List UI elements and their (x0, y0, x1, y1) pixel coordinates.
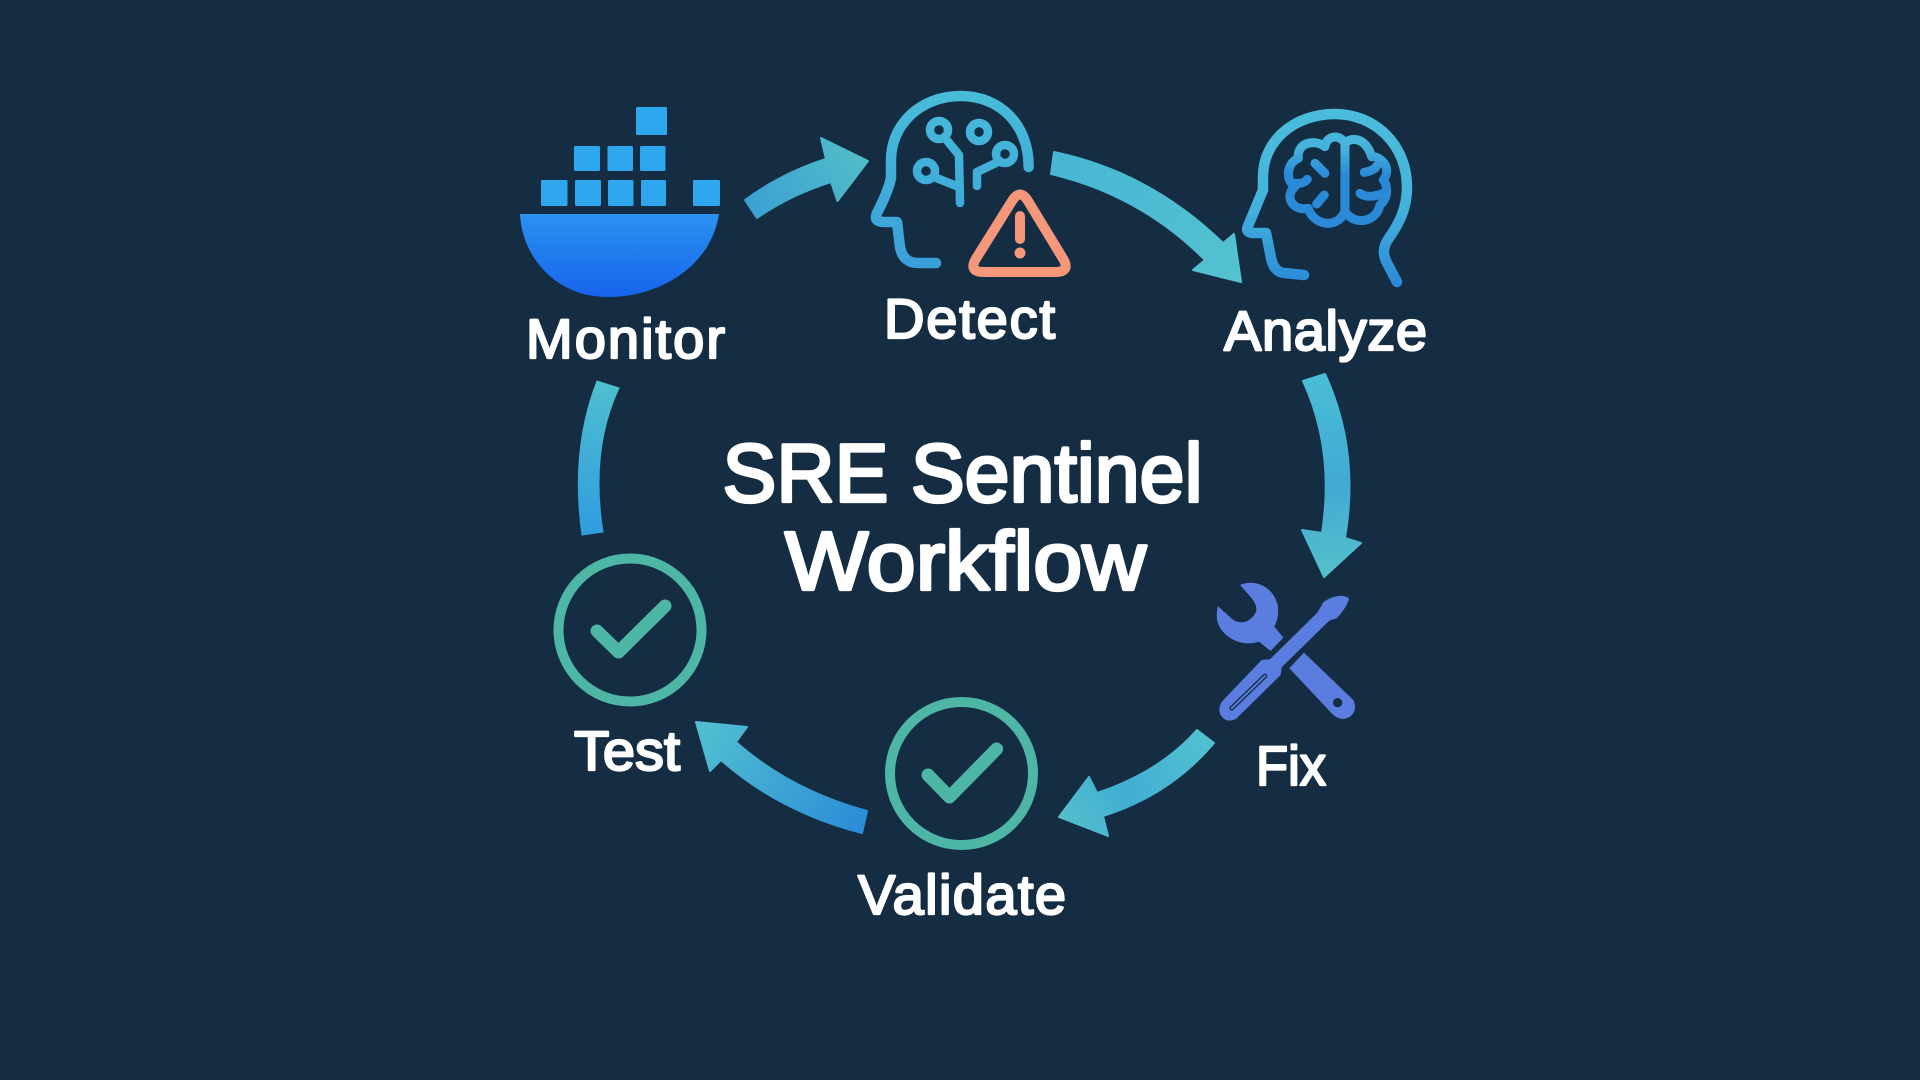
step: Detect (876, 96, 1066, 350)
label: Validate: Validate (858, 863, 1066, 926)
arrow: Analyze to Fix (1302, 374, 1361, 577)
title: SRE Sentinel (722, 426, 1202, 520)
title (722, 426, 1202, 608)
label: Monitor: Monitor (526, 307, 725, 370)
label: Fix: Fix (1256, 734, 1326, 797)
step: Test (558, 558, 702, 782)
label: Analyze: Analyze (1224, 299, 1427, 362)
arrow: Test to Monitor (578, 381, 619, 535)
icon: screwdriver (1219, 596, 1349, 721)
icon: wrench and screwdriver (1217, 583, 1355, 721)
icon: head with brain (1247, 114, 1407, 282)
title: Workflow (785, 514, 1147, 608)
arrow: Fix to Validate (1059, 730, 1214, 836)
arrow: Monitor to Detect (745, 138, 868, 218)
arrow: Detect to Analyze (1051, 152, 1241, 282)
label: Test: Test (574, 719, 680, 782)
step: Monitor (520, 107, 725, 370)
label: Detect: Detect (884, 287, 1055, 350)
arrow: Validate to Test (696, 722, 867, 833)
step: Analyze (1224, 114, 1427, 362)
icon: check circle (558, 558, 702, 702)
step: Fix (1217, 583, 1355, 797)
icon: AI head (876, 96, 1029, 263)
icon: check circle (890, 702, 1033, 845)
icon: wrench (1217, 583, 1355, 719)
icon: warning triangle (973, 194, 1066, 272)
icon: container ship (520, 107, 720, 297)
step: Validate (858, 702, 1066, 926)
